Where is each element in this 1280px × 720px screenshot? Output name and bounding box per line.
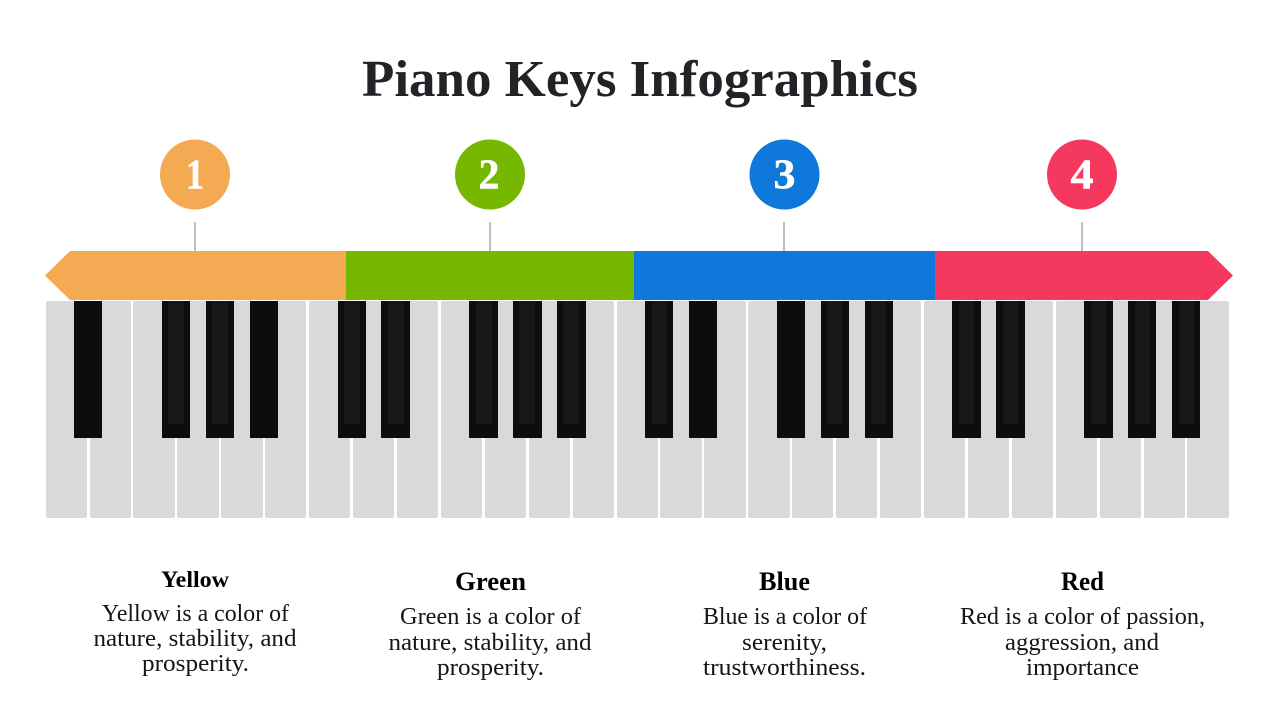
numbered markers xyxy=(160,140,1117,251)
colored arrow band xyxy=(45,251,1233,300)
text block: green: Green is a color of xyxy=(400,604,581,630)
text block: blue xyxy=(703,567,867,681)
marker 2: 2 xyxy=(478,152,500,198)
text block: green: prosperity. xyxy=(437,655,544,681)
text block: blue: trustworthiness. xyxy=(703,655,866,681)
text block: blue: serenity, xyxy=(742,630,827,656)
marker 1: 1 xyxy=(186,152,204,198)
marker 2 xyxy=(455,140,525,251)
text block: green xyxy=(388,567,592,681)
text block: red: Red is a color of passion, xyxy=(960,604,1205,630)
title: Piano Keys Infographics xyxy=(362,51,918,108)
text block: yellow: Yellow xyxy=(161,567,229,592)
marker 4: 4 xyxy=(1070,152,1094,198)
black key highlights xyxy=(168,301,1194,424)
text block: yellow: nature, stability, and xyxy=(94,626,296,652)
text block: red: aggression, and xyxy=(1005,630,1159,656)
text block: red xyxy=(960,567,1205,681)
marker 4 xyxy=(1047,140,1117,251)
piano black keys xyxy=(74,301,1200,438)
marker 3: 3 xyxy=(774,152,796,198)
text block: green: Green xyxy=(455,567,527,596)
text block: yellow: Yellow is a color of xyxy=(102,601,289,627)
marker 3 xyxy=(750,140,820,251)
text block: blue: Blue xyxy=(759,567,810,596)
text block: yellow: prosperity. xyxy=(142,651,249,677)
text block: red: Red xyxy=(1061,567,1105,596)
text block: red: importance xyxy=(1026,655,1139,681)
text block: blue: Blue is a color of xyxy=(703,604,867,630)
text block: yellow xyxy=(94,567,296,677)
marker 1 xyxy=(160,140,230,251)
piano white keys xyxy=(46,301,1229,518)
text block: green: nature, stability, and xyxy=(388,630,592,656)
